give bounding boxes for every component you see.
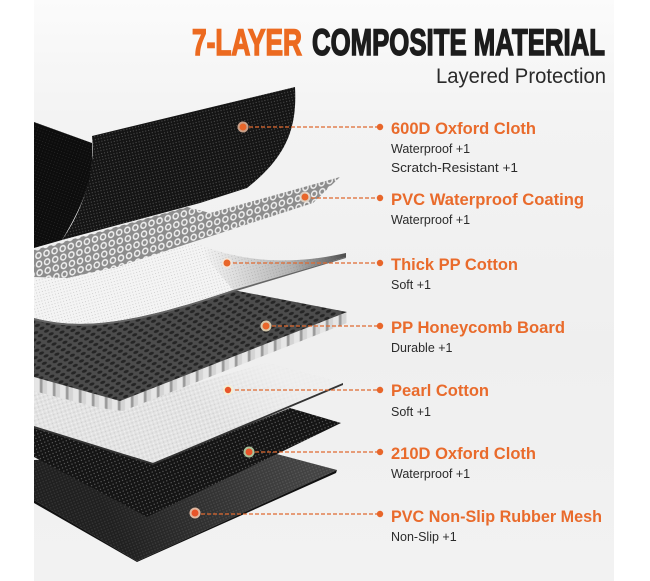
- label: Thick PP Cotton: Thick PP Cotton: [391, 256, 518, 274]
- subtitle: Layered Protection: [436, 65, 606, 88]
- layer 7: PVC non-slip rubber mesh: [34, 453, 337, 562]
- label: PVC Waterproof Coating: PVC Waterproof Coating: [391, 191, 584, 209]
- leader: PP Honeycomb Board: [260, 320, 383, 332]
- label: Pearl Cotton: Soft +1: [391, 405, 431, 419]
- layer 1: 600D Oxford cloth: [34, 87, 295, 248]
- label: PP Honeycomb Board: [391, 319, 565, 355]
- leader: PVC Non-Slip Rubber Mesh: [190, 508, 383, 518]
- leader: 210D Oxford Cloth: [244, 446, 383, 458]
- title: [192, 22, 605, 63]
- label: 600D Oxford Cloth: Scratch-Resistant +1: [391, 161, 518, 175]
- label: 210D Oxford Cloth: Waterproof +1: [391, 467, 470, 481]
- layer 4: PP honeycomb board: [34, 290, 347, 411]
- label: PVC Non-Slip Rubber Mesh: Non-Slip +1: [391, 530, 457, 544]
- leader: Thick PP Cotton: [222, 258, 383, 268]
- label: Pearl Cotton: Pearl Cotton: [391, 382, 489, 400]
- label: PP Honeycomb Board: PP Honeycomb Board: [391, 319, 565, 337]
- material layers stack: [34, 87, 347, 562]
- layer 5: pearl cotton: [34, 363, 343, 465]
- label: Thick PP Cotton: [391, 256, 518, 292]
- label: PVC Waterproof Coating: [391, 191, 584, 227]
- leader: 600D Oxford Cloth: [238, 122, 383, 132]
- layer 3: thick PP cotton: [34, 242, 346, 326]
- label: 600D Oxford Cloth: Waterproof +1: [391, 142, 470, 156]
- label: 210D Oxford Cloth: 210D Oxford Cloth: [391, 445, 536, 463]
- label: PVC Non-Slip Rubber Mesh: PVC Non-Slip Rubber Mesh: [391, 508, 602, 526]
- label: 600D Oxford Cloth: 600D Oxford Cloth: [391, 120, 536, 138]
- label: PVC Non-Slip Rubber Mesh: [391, 508, 602, 544]
- label: 210D Oxford Cloth: [391, 445, 536, 481]
- label: PP Honeycomb Board: Durable +1: [391, 341, 453, 355]
- layer 2: PVC waterproof coating: [34, 177, 340, 278]
- layer 6: 210D Oxford cloth: [34, 408, 341, 517]
- leader: Pearl Cotton: [223, 385, 383, 395]
- label: PVC Waterproof Coating: Waterproof +1: [391, 213, 470, 227]
- label: 600D Oxford Cloth: [391, 120, 536, 175]
- label: Thick PP Cotton: Soft +1: [391, 278, 431, 292]
- title: 7-LAYER: [192, 22, 302, 63]
- leader: PVC Waterproof Coating: [300, 192, 383, 202]
- label: Pearl Cotton: [391, 382, 489, 419]
